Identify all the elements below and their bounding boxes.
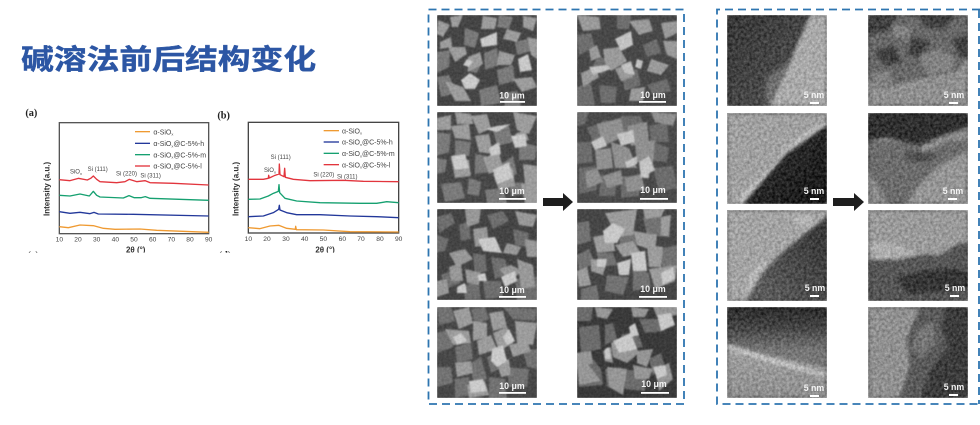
TEM image row 2 right <box>868 113 968 204</box>
peak labels a: Si (220) <box>116 171 137 177</box>
clipped label d: (d) <box>219 251 231 262</box>
legend a <box>135 129 206 171</box>
SEM image row 1 right <box>577 15 677 106</box>
peak labels b: Si (111) <box>271 155 291 161</box>
legend a: x <box>171 143 173 148</box>
scale bar: 10 μm <box>640 90 666 100</box>
arrow: TEM before to after <box>833 193 864 211</box>
scale bar: 5 nm <box>804 90 824 100</box>
curve: green a <box>59 191 209 200</box>
peak labels a: x <box>80 171 82 176</box>
curve: red b <box>248 164 399 182</box>
TEM frame right side <box>978 10 980 404</box>
peak labels b: SiO <box>264 168 274 174</box>
legend a: @C-5%-l <box>173 164 202 171</box>
curve: blue a <box>59 212 209 216</box>
x axis b: 20 <box>263 236 271 243</box>
legend b: @C-5%-m <box>362 151 395 158</box>
peak labels a: SiO <box>70 170 80 176</box>
legend b: @C-5%-l <box>362 162 391 169</box>
x axis b: 70 <box>357 236 365 243</box>
legend a: α-SiO <box>153 164 171 171</box>
TEM image row 3 right <box>868 210 968 301</box>
peak labels b <box>264 155 358 181</box>
legend b: x <box>360 153 362 158</box>
y axis label a: Intensity (a.u.) <box>43 162 52 216</box>
legend a: α-SiO <box>153 141 171 148</box>
scale bar: 5 nm <box>804 186 824 196</box>
scale bar: 5 nm <box>944 90 964 100</box>
scale bar: 5 nm <box>944 382 964 392</box>
SEM image row 4 left <box>437 307 537 398</box>
scale bar: 10 μm <box>499 186 525 196</box>
x axis a: 20 <box>74 236 82 243</box>
x axis a: 90 <box>205 236 213 243</box>
TEM image row 2 left <box>727 113 827 204</box>
panel: SEM images <box>428 10 684 404</box>
SEM image row 2 right <box>577 112 677 203</box>
panel: TEM images <box>717 10 980 404</box>
scale bar: 10 μm <box>640 185 666 195</box>
x axis b: 2θ (°) <box>315 245 335 254</box>
scale bar: 10 μm <box>499 90 525 100</box>
peak labels a <box>70 167 161 180</box>
clipped label c: (c) <box>27 251 39 262</box>
legend b: x <box>360 165 362 170</box>
x axis b: 40 <box>301 236 309 243</box>
chart: XRD panel a <box>25 108 213 262</box>
scale bar: 10 μm <box>641 379 667 389</box>
curve: green b <box>248 185 399 203</box>
x axis a: 10 <box>56 236 63 243</box>
legend b: @C-5%-h <box>362 140 393 147</box>
legend b <box>324 128 395 170</box>
y axis label b: Intensity (a.u.) <box>232 162 241 216</box>
legend b: x <box>360 131 362 136</box>
TEM image row 4 right <box>868 307 968 398</box>
legend a: x <box>171 132 173 137</box>
title: 碱溶法前后结构变化 <box>21 44 316 75</box>
panel label a: (a) <box>25 108 37 119</box>
peak labels b: Si (311) <box>337 175 358 181</box>
legend a: @C-5%-m <box>173 152 206 159</box>
peak labels b: x <box>274 169 276 174</box>
SEM image row 4 right <box>577 307 677 398</box>
scale bar: 5 nm <box>945 283 965 293</box>
plot frame a <box>59 123 209 234</box>
x axis a: 2θ (°) <box>126 245 146 254</box>
x axis a: 60 <box>149 236 157 243</box>
x axis a: 80 <box>186 236 194 243</box>
TEM dashed frame <box>717 10 980 404</box>
legend a: x <box>171 155 173 160</box>
legend a: @C-5%-h <box>173 141 204 148</box>
TEM image row 1 left <box>727 15 827 106</box>
x axis a: 70 <box>168 236 175 243</box>
panel label b: (b) <box>217 110 230 121</box>
SEM image row 3 left <box>437 209 537 300</box>
x axis a <box>56 237 212 253</box>
scale bar: 10 μm <box>640 284 666 294</box>
legend a: α-SiO <box>153 129 171 136</box>
x axis b: 60 <box>339 236 346 243</box>
x axis a: 50 <box>130 236 138 243</box>
plot frame b <box>248 122 399 233</box>
x axis a: 40 <box>112 236 119 243</box>
SEM dashed frame <box>428 10 684 404</box>
x axis b: 30 <box>282 236 290 243</box>
TEM image row 1 right <box>868 15 968 106</box>
legend b: α-SiO <box>342 151 360 158</box>
peak labels a: Si (311) <box>140 174 161 180</box>
scale bar: 10 μm <box>499 285 525 295</box>
x axis b <box>245 236 402 253</box>
arrow: SEM before to after <box>543 193 573 211</box>
SEM image row 1 left <box>437 15 537 106</box>
legend b: α-SiO <box>342 128 360 135</box>
curve: orange b <box>248 225 399 232</box>
SEM image row 3 right <box>577 209 677 300</box>
x axis b: 50 <box>320 236 327 243</box>
legend a: x <box>171 166 173 171</box>
TEM image row 3 left <box>727 210 827 301</box>
curve: orange a <box>59 225 209 232</box>
x axis b: 90 <box>395 236 403 243</box>
scale bar: 5 nm <box>804 383 824 393</box>
x axis a: 30 <box>93 236 101 243</box>
x axis b: 80 <box>376 236 384 243</box>
curve: blue b <box>248 205 399 218</box>
scale bar: 10 μm <box>499 381 525 391</box>
scale bar: 5 nm <box>805 283 825 293</box>
SEM image row 2 left <box>437 112 537 203</box>
legend b: α-SiO <box>342 162 360 169</box>
curve: red a <box>59 176 209 185</box>
legend b: α-SiO <box>342 140 360 147</box>
legend a: α-SiO <box>153 152 171 159</box>
TEM image row 4 left <box>727 307 827 398</box>
x axis b: 10 <box>245 236 252 243</box>
chart: XRD panel b <box>217 110 403 262</box>
peak labels b: Si (220) <box>313 173 334 179</box>
legend b: x <box>360 142 362 147</box>
peak labels a: Si (111) <box>88 167 108 173</box>
scale bar: 5 nm <box>943 186 963 196</box>
